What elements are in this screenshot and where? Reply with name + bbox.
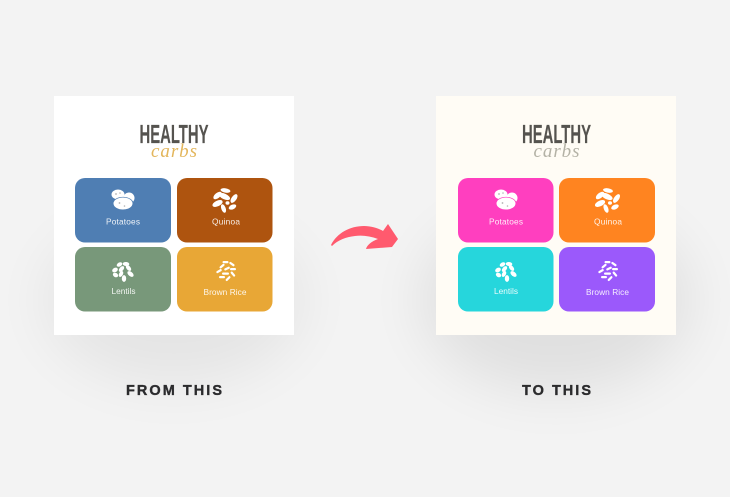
tile: brown rice: Brown Rice — [204, 287, 247, 297]
shadow: right card — [421, 208, 691, 392]
tile: brown rice — [177, 247, 272, 312]
tile: potatoes — [75, 178, 171, 242]
heading: healthy: HEALTHY — [522, 119, 591, 149]
tile: quinoa — [177, 178, 272, 242]
heading: healthy: HEALTHY — [140, 119, 208, 149]
panel: from this infographic — [54, 96, 294, 335]
shadow: left card — [44, 215, 304, 385]
caption: to this: TO THIS — [522, 383, 591, 399]
tile: brown rice: Brown Rice — [586, 287, 629, 297]
tile: lentils: Lentils — [112, 286, 136, 296]
arrow — [331, 224, 398, 249]
heading: carbs: carbs — [534, 141, 580, 162]
panel: to this infographic — [436, 96, 676, 335]
heading: carbs: carbs — [151, 141, 197, 162]
tile: lentils — [75, 247, 171, 312]
tile: lentils — [458, 247, 554, 312]
tile: lentils: Lentils — [494, 286, 518, 296]
caption: from this: FROM THIS — [126, 383, 222, 399]
tile: brown rice — [559, 247, 655, 312]
tile: quinoa — [559, 178, 655, 242]
tile: quinoa: Quinoa — [212, 216, 240, 226]
tile: potatoes — [458, 178, 554, 242]
tile: potatoes: Potatoes — [489, 216, 523, 226]
tile: potatoes: Potatoes — [106, 216, 140, 226]
tile: quinoa: Quinoa — [594, 216, 622, 226]
